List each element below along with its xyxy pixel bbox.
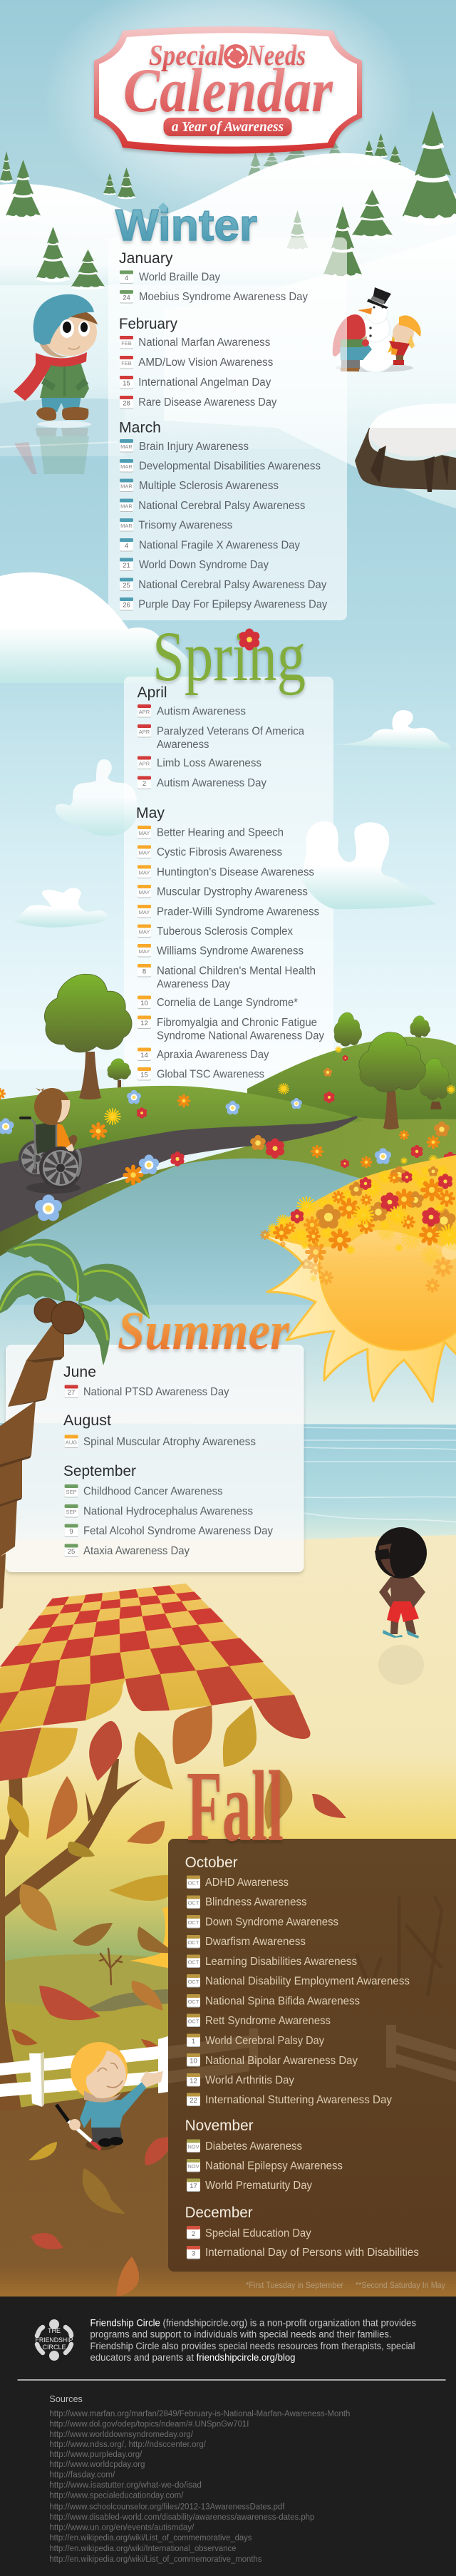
sources: http://fasday.com/ bbox=[49, 2471, 115, 2480]
list: summer: Fetal Alcohol Syndrome Awareness Day bbox=[83, 1525, 273, 1537]
list: spring: Syndrome National Awareness Day bbox=[157, 1030, 324, 1042]
list: fall: ADHD Awareness bbox=[205, 1877, 289, 1889]
sources: http://www.worlddownsyndromeday.org/ bbox=[49, 2431, 194, 2439]
icon: lifebuoy bbox=[224, 44, 248, 68]
background: sky and water bbox=[0, 0, 456, 1971]
title: Special Needs: Needs bbox=[247, 39, 306, 71]
title plaque bbox=[94, 26, 362, 154]
list: spring bbox=[136, 684, 324, 1081]
list: spring: 2 bbox=[142, 780, 146, 788]
list: winter: 21 bbox=[123, 562, 130, 570]
sources: http://www.worldcpday.org bbox=[49, 2460, 145, 2469]
coconuts bbox=[34, 1298, 84, 1334]
list: winter: World Braille Day bbox=[139, 271, 220, 283]
list: fall: OCT bbox=[188, 1879, 200, 1887]
list: summer: Childhood Cancer Awareness bbox=[83, 1486, 223, 1498]
spring trees behind hills bbox=[108, 1012, 430, 1093]
list: winter: 28 bbox=[123, 399, 130, 408]
about text: Friendship Circle (friendshipcircle.org) is a non-profit organization that provides bbox=[90, 2318, 416, 2329]
list: winter: Purple Day For Epilepsy Awareness Day bbox=[138, 599, 328, 611]
list: fall: October bbox=[185, 1854, 238, 1871]
list: fall: Special Education Day bbox=[205, 2227, 311, 2239]
about text: Friendship Circle also provides special needs resources from therapists, special bbox=[90, 2341, 415, 2351]
list: winter: MAR bbox=[120, 483, 133, 489]
sources: http://www.marfan.org/marfan/2849/February-is-National-Marfan-Awareness-Month bbox=[49, 2410, 350, 2418]
list: fall: OCT bbox=[188, 1959, 200, 1965]
sources: http://en.wikipedia.org/wiki/List_of_commemorative_months bbox=[49, 2555, 262, 2564]
list: spring: Awareness bbox=[157, 739, 209, 751]
list: spring: 10 bbox=[140, 1000, 148, 1007]
list: summer: Ataxia Awareness Day bbox=[83, 1545, 190, 1557]
sources: http://www.ndss.org/, http://ndsccenter.org/ bbox=[49, 2441, 207, 2449]
list: fall: Blindness Awareness bbox=[205, 1897, 307, 1908]
list: spring: MAY bbox=[139, 948, 150, 955]
list: spring: Apraxia Awareness Day bbox=[157, 1049, 269, 1061]
right spring trees bbox=[359, 1032, 451, 1129]
list: spring: 15 bbox=[140, 1071, 148, 1079]
list: spring: MAY bbox=[139, 909, 150, 915]
character: boy in winter hat bbox=[14, 294, 98, 428]
list: winter: 15 bbox=[123, 379, 130, 388]
list: spring: Limb Loss Awareness bbox=[157, 757, 261, 769]
list: winter: Moebius Syndrome Awareness Day bbox=[139, 291, 308, 303]
snow island with rock bbox=[355, 404, 456, 492]
list: fall: World Prematurity Day bbox=[205, 2180, 312, 2192]
spring hill and road bbox=[0, 1086, 363, 1232]
about text bbox=[90, 2318, 416, 2363]
list: winter: MAR bbox=[120, 503, 133, 509]
heading: Summer: Summer bbox=[118, 1301, 290, 1361]
list: winter: National Cerebral Palsy Awareness bbox=[138, 500, 306, 512]
sun bbox=[265, 1181, 456, 1402]
sources: http://en.wikipedia.org/wiki/International_observance bbox=[49, 2545, 236, 2553]
panel: winter background bbox=[108, 237, 347, 620]
list: spring: Global TSC Awareness bbox=[157, 1068, 264, 1081]
list: spring: Cornelia de Lange Syndrome* bbox=[157, 997, 298, 1009]
list: winter: World Down Syndrome Day bbox=[139, 559, 269, 571]
cloud left bbox=[56, 759, 137, 836]
list: fall: November bbox=[185, 2118, 254, 2134]
list: winter: National Fragile X Awareness Day bbox=[139, 539, 300, 552]
footer background bbox=[0, 2297, 456, 2576]
list: fall: World Cerebral Palsy Day bbox=[205, 2035, 324, 2047]
list: winter: March bbox=[119, 419, 161, 436]
list: summer bbox=[63, 1364, 273, 1557]
list: summer: Spinal Muscular Atrophy Awareness bbox=[83, 1436, 256, 1448]
list: fall: 3 bbox=[192, 2250, 195, 2257]
sources: http://www.isastutter.org/what-we-do/isad bbox=[49, 2481, 202, 2490]
icon: red flower bbox=[239, 629, 259, 650]
list: spring: May bbox=[136, 805, 165, 821]
list: summer: August bbox=[63, 1412, 111, 1429]
divider bbox=[17, 2379, 446, 2381]
list: fall: OCT bbox=[188, 1998, 200, 2005]
list: fall: Dwarfism Awareness bbox=[205, 1936, 306, 1948]
spring flowers bbox=[0, 1047, 456, 1221]
sources: http://www.un.org/en/events/autismday/ bbox=[49, 2524, 195, 2533]
sources: http://www.dol.gov/odep/topics/ndeam/#.UNSpnGw701I bbox=[49, 2420, 249, 2428]
list: fall: Diabetes Awareness bbox=[205, 2140, 302, 2152]
list: fall bbox=[185, 1854, 419, 2259]
list: winter: AMD/Low Vision Awareness bbox=[138, 356, 274, 369]
list: fall: 10 bbox=[190, 2058, 197, 2065]
list: fall: OCT bbox=[188, 1979, 200, 1985]
list: fall: 12 bbox=[190, 2078, 197, 2085]
list: spring: MAY bbox=[139, 869, 150, 876]
footnotes bbox=[246, 2280, 445, 2290]
about text: educators and parents at friendshipcircle.org/blog bbox=[90, 2352, 295, 2363]
big cloud bbox=[0, 573, 201, 683]
list: summer: SEP bbox=[66, 1489, 77, 1495]
list: summer: 27 bbox=[68, 1389, 75, 1397]
list: winter: 4 bbox=[125, 274, 128, 282]
list: spring: Autism Awareness Day bbox=[157, 777, 266, 789]
list: winter: 24 bbox=[123, 294, 130, 302]
list: fall: 2 bbox=[192, 2230, 195, 2238]
heading: Spring: Spring bbox=[152, 617, 306, 696]
list: winter: MAR bbox=[120, 443, 133, 450]
list: spring: Better Hearing and Speech bbox=[157, 827, 284, 838]
small bare tree bbox=[100, 1949, 122, 1984]
list: summer: National PTSD Awareness Day bbox=[83, 1386, 229, 1398]
list: winter: January bbox=[119, 250, 173, 267]
list: winter: International Angelman Day bbox=[138, 376, 271, 389]
list: summer: AUG bbox=[66, 1439, 77, 1446]
list: spring: APR bbox=[139, 760, 150, 767]
list: spring: APR bbox=[139, 729, 150, 735]
list: winter: 26 bbox=[123, 602, 130, 609]
list: fall: International Day of Persons with Disabilities bbox=[205, 2247, 419, 2259]
list: fall: OCT bbox=[188, 2018, 200, 2025]
list: winter: Rare Disease Awareness Day bbox=[138, 396, 277, 409]
sources: http://www.disabled-world.com/disability/awareness/awareness-dates.php bbox=[49, 2513, 314, 2522]
heading: Fall: Fall bbox=[187, 1750, 284, 1862]
list: spring: MAY bbox=[139, 928, 150, 935]
cloud right bbox=[328, 710, 451, 751]
list: fall: International Stuttering Awareness Day bbox=[205, 2094, 392, 2106]
list: fall: OCT bbox=[188, 1919, 200, 1926]
list: fall: Learning Disabilities Awareness bbox=[205, 1956, 357, 1968]
fall tree bbox=[0, 1759, 142, 2110]
boy reflection bbox=[14, 428, 89, 474]
list: winter: February bbox=[119, 316, 177, 332]
list: winter: Brain Injury Awareness bbox=[139, 441, 249, 453]
list: fall: OCT bbox=[188, 1899, 200, 1907]
list: fall: NOV bbox=[187, 2163, 200, 2170]
list: spring: April bbox=[138, 684, 167, 701]
list: spring: MAY bbox=[139, 889, 150, 896]
list: spring: APR bbox=[139, 709, 150, 715]
list: winter: 4 bbox=[125, 542, 128, 550]
panel: fall background bbox=[168, 1839, 456, 2272]
title: Calendar: Calendar bbox=[123, 56, 333, 125]
list: fall: 22 bbox=[190, 2097, 197, 2105]
panel: spring background bbox=[124, 677, 333, 1094]
cloud centre right bbox=[302, 821, 436, 909]
sources: Sources bbox=[49, 2393, 83, 2404]
sea bbox=[0, 1423, 456, 1540]
palm leaves bbox=[0, 1239, 150, 1365]
list: fall: National Disability Employment Awareness bbox=[205, 1975, 410, 1988]
list: winter: Developmental Disabilities Awareness bbox=[139, 461, 321, 472]
winter trees bbox=[6, 111, 456, 289]
panel: summer background bbox=[6, 1345, 304, 1572]
list: fall: National Spina Bifida Awareness bbox=[205, 1995, 360, 2007]
list: winter: Multiple Sclerosis Awareness bbox=[139, 480, 279, 492]
fall scenery bbox=[0, 1954, 456, 2297]
list: spring: 8 bbox=[142, 968, 146, 975]
cloud far left bbox=[14, 888, 108, 928]
list: spring: Huntington's Disease Awareness bbox=[157, 866, 314, 878]
list: fall: World Arthritis Day bbox=[205, 2074, 294, 2086]
list: summer: June bbox=[63, 1364, 96, 1380]
list: spring: Autism Awareness bbox=[157, 706, 246, 718]
list: fall: Down Syndrome Awareness bbox=[205, 1916, 338, 1928]
logo: The Friendship Circle: THE bbox=[48, 2327, 61, 2334]
list: winter: National Marfan Awareness bbox=[138, 337, 271, 349]
fence bbox=[0, 2036, 168, 2107]
subtitle banner: a Year of Awareness bbox=[172, 119, 284, 135]
list: summer: SEP bbox=[66, 1509, 77, 1515]
list: winter: FEB bbox=[121, 360, 132, 366]
character: child with cane bbox=[56, 2042, 163, 2150]
snow hills bbox=[0, 153, 456, 508]
winter faded back trees bbox=[242, 142, 346, 198]
big spring tree bbox=[44, 974, 132, 1099]
title: Special Needs bbox=[149, 39, 306, 71]
list: spring: Williams Syndrome Awareness bbox=[157, 945, 304, 957]
about text: programs and support to individuals with special needs and their families. bbox=[90, 2329, 392, 2340]
list: fall: NOV bbox=[187, 2143, 200, 2150]
list: spring: 14 bbox=[140, 1052, 148, 1059]
list: spring: Awareness Day bbox=[157, 978, 230, 990]
list: summer: September bbox=[63, 1463, 136, 1479]
list: spring: MAY bbox=[139, 830, 150, 836]
pond bbox=[0, 1159, 456, 1305]
list: winter: National Cerebral Palsy Awareness Day bbox=[138, 579, 327, 591]
list: fall: National Epilepsy Awareness bbox=[205, 2160, 343, 2172]
spring back hill and grass bbox=[0, 1037, 456, 1262]
list: winter: MAR bbox=[120, 523, 133, 529]
list: fall: 17 bbox=[190, 2182, 197, 2190]
sources: http://www.schoolcounselor.org/files/2012-13AwarenessDates.pdf bbox=[49, 2503, 285, 2511]
list: summer: 9 bbox=[69, 1528, 73, 1536]
sun flower crown bbox=[261, 1155, 456, 1291]
list: summer: National Hydrocephalus Awareness bbox=[83, 1506, 253, 1517]
list: winter: MAR bbox=[120, 463, 133, 470]
logo: The Friendship Circle bbox=[36, 2319, 73, 2361]
list: spring: Cystic Fibrosis Awareness bbox=[157, 846, 282, 858]
sources: http://www.specialeducationday.com/ bbox=[49, 2491, 184, 2500]
list: winter: FEB bbox=[121, 340, 132, 347]
list: summer: 25 bbox=[68, 1548, 75, 1556]
sand edge bbox=[0, 1535, 456, 1561]
list: fall: December bbox=[185, 2205, 253, 2221]
sources: http://www.purpleday.org/ bbox=[49, 2451, 142, 2459]
winter trees behind hills bbox=[0, 133, 405, 199]
list: spring: MAY bbox=[139, 850, 150, 856]
plaque glow bbox=[43, 0, 413, 214]
list: spring: Muscular Dystrophy Awareness bbox=[157, 886, 308, 898]
list: winter bbox=[119, 250, 328, 611]
heading: Winter: Winter bbox=[115, 201, 257, 250]
list: spring: 12 bbox=[140, 1020, 148, 1027]
falling leaves bbox=[7, 1705, 346, 2297]
list: spring: Paralyzed Veterans Of America bbox=[157, 726, 304, 737]
palm tree trunk bbox=[0, 1325, 64, 1609]
list: winter: 25 bbox=[123, 582, 130, 590]
list: fall: Rett Syndrome Awareness bbox=[205, 2015, 331, 2027]
list: fall: 1 bbox=[192, 2038, 195, 2046]
blanket bbox=[0, 1584, 311, 1781]
list: spring: Prader-Willi Syndrome Awareness bbox=[157, 905, 319, 918]
snowman with two children bbox=[333, 287, 421, 372]
sources: http://en.wikipedia.org/wiki/List_of_commemorative_days bbox=[49, 2534, 252, 2542]
list: spring: Tuberous Sclerosis Complex bbox=[157, 925, 293, 938]
character: child in wheelchair bbox=[19, 1088, 82, 1194]
logo: The Friendship Circle: FRIENDSHIP bbox=[36, 2336, 73, 2344]
list: winter: Trisomy Awareness bbox=[138, 520, 233, 532]
list: spring: Fibromyalgia and Chronic Fatigue bbox=[157, 1017, 317, 1029]
list: fall: National Bipolar Awareness Day bbox=[205, 2055, 358, 2067]
list: spring: National Children's Mental Health bbox=[157, 965, 316, 977]
fall panel ghost scenery bbox=[168, 1897, 456, 2083]
list: fall: OCT bbox=[188, 1939, 200, 1946]
fall sun bbox=[130, 1907, 168, 1968]
sources bbox=[49, 2393, 350, 2564]
logo: The Friendship Circle: CIRCLE bbox=[42, 2344, 66, 2351]
character: child on beach bbox=[375, 1527, 427, 1685]
footnotes: *First Tuesday in September bbox=[246, 2280, 343, 2290]
footnotes: **Second Saturday In May bbox=[356, 2280, 445, 2290]
title: Special Needs: Special bbox=[149, 39, 225, 71]
